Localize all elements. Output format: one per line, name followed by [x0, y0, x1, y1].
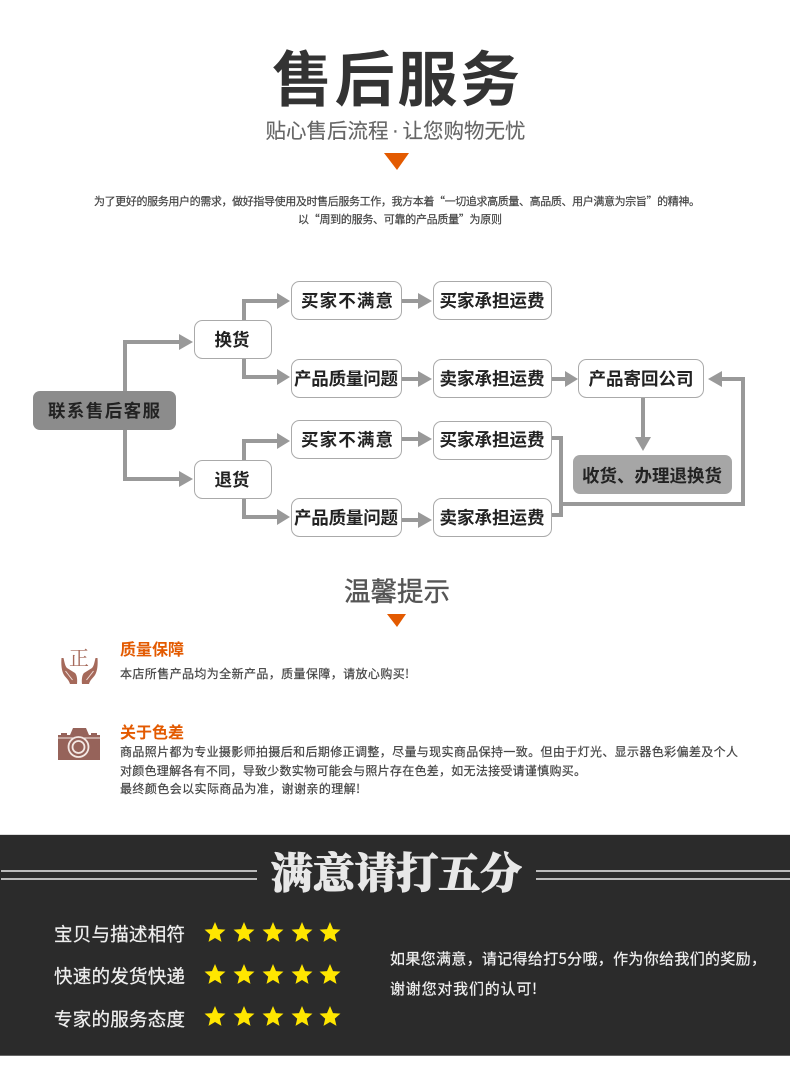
arrow: exchange to quality issue — [244, 358, 290, 385]
node: return — [194, 460, 272, 498]
node: buyer pays shipping — [434, 422, 552, 460]
node: buyer pays shipping — [434, 282, 552, 320]
node: seller pays shipping: 卖家承担运费 — [440, 505, 544, 530]
stars row 2 — [205, 964, 340, 984]
arrow: return to buyer unsatisfied — [244, 433, 290, 460]
node: quality issue — [292, 498, 402, 536]
node: contact after-sales — [33, 391, 176, 430]
arrow: row 2 to seller pays — [401, 371, 432, 387]
node: seller pays shipping — [434, 360, 552, 398]
rating label: service: 专家的服务态度 — [54, 1006, 185, 1032]
node: return: 退货 — [214, 467, 250, 492]
subtitle — [266, 114, 526, 144]
intro text: 以“周到的服务、可靠的产品质量”为原则 — [298, 211, 502, 227]
node: quality issue — [292, 360, 402, 398]
icon: orange down triangle — [384, 153, 409, 170]
text: thank-you message: 谢谢您对我们的认可! — [390, 978, 537, 999]
node: receive and process — [573, 455, 732, 494]
arrow: contact to return — [125, 430, 193, 487]
arrow: row 1 to buyer pays — [401, 293, 432, 309]
node: buyer unsatisfied — [292, 282, 402, 320]
node: seller pays shipping — [434, 498, 552, 536]
node: buyer unsatisfied — [292, 420, 402, 458]
node: buyer unsatisfied: 买家不满意 — [301, 288, 393, 313]
icon: hands with 正 — [61, 642, 98, 684]
node: ship back to company — [578, 360, 704, 398]
text: color difference body — [120, 743, 738, 797]
arrow: ship back to processing — [635, 397, 651, 451]
icon: hands with 正: 正 — [69, 642, 89, 671]
node: buyer unsatisfied: 买家不满意 — [301, 427, 393, 452]
arrow: row 4 to seller pays — [401, 512, 432, 528]
text: thank-you message: 如果您满意，请记得给打5分哦，作为你给我们的奖励， — [390, 948, 766, 969]
node: quality issue: 产品质量问题 — [294, 505, 398, 530]
intro text — [94, 193, 700, 227]
node: contact after-sales: 联系售后客服 — [48, 398, 160, 423]
intro text: 为了更好的服务用户的需求，做好指导使用及时售后服务工作，我方本着“一切追求高质量、高品质、用户满意为宗旨”的精神。 — [94, 193, 700, 209]
text: color difference body: 商品照片都为专业摄影师拍摄后和后期修正调整，尽量与现实商品保持一致。但由于灯光、显示器色彩偏差及个人 — [120, 743, 738, 760]
text: quality guarantee body: 本店所售产品均为全新产品，质量保障，请放心购买! — [120, 665, 409, 682]
title: 售后服务 — [272, 32, 520, 119]
heading: quality guarantee: 质量保障 — [120, 636, 184, 660]
subtitle: 贴心售后流程 — [266, 114, 388, 144]
arrow: seller pays to ship back — [552, 371, 578, 387]
icon: camera — [58, 728, 100, 760]
node: exchange — [194, 320, 272, 358]
arrow: row 3 to buyer pays — [401, 431, 432, 447]
stars row 1 — [205, 922, 340, 942]
panel heading: 满意请打五分 — [271, 841, 522, 901]
node: ship back to company: 产品寄回公司 — [588, 366, 694, 391]
arrow: contact to exchange — [125, 334, 193, 391]
node: receive and process: 收货、办理退换货 — [582, 463, 722, 488]
panel: rating — [0, 834, 790, 1056]
subtitle: · — [392, 119, 399, 142]
icon: small orange triangle — [387, 614, 406, 627]
node: exchange: 换货 — [214, 327, 250, 352]
flowchart — [33, 282, 743, 536]
node: quality issue: 产品质量问题 — [294, 366, 398, 391]
arrow: return to quality issue — [244, 498, 290, 525]
subtitle: 让您购物无忧 — [402, 114, 526, 144]
arrow: return loop — [552, 371, 743, 515]
text: thank-you message — [390, 948, 766, 999]
node: buyer pays shipping: 买家承担运费 — [440, 288, 544, 313]
node: buyer pays shipping: 买家承担运费 — [440, 427, 544, 452]
node: seller pays shipping: 卖家承担运费 — [440, 366, 544, 391]
arrow: exchange to buyer unsatisfied — [244, 293, 290, 320]
rating label: description: 宝贝与描述相符 — [54, 921, 185, 947]
heading: about color difference: 关于色差 — [120, 719, 184, 743]
heading: warm tips: 温馨提示 — [344, 570, 450, 609]
text: color difference body: 最终颜色会以实际商品为准，谢谢亲的理解! — [120, 780, 360, 797]
stars row 3 — [205, 1006, 340, 1026]
rating label: shipping: 快速的发货快递 — [54, 963, 185, 989]
text: color difference body: 对颜色理解各有不同，导致少数实物可能会与照片存在色差，如无法接受请谨慎购买。 — [120, 762, 586, 779]
